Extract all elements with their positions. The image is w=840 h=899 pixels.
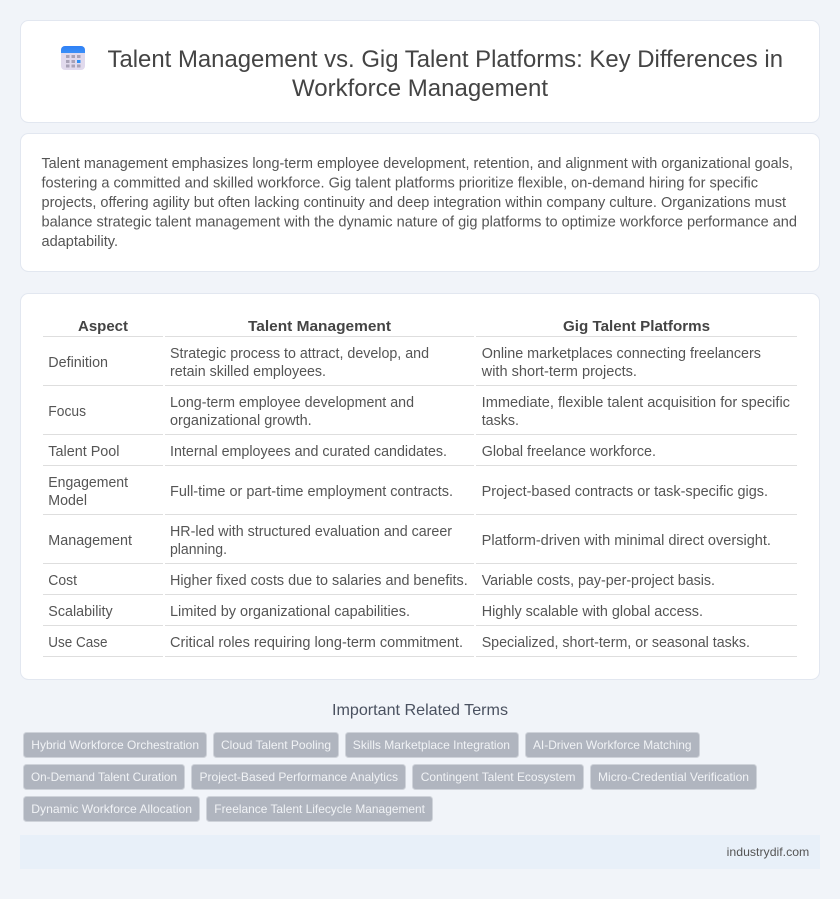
- tag: Skills Marketplace Integration: [346, 732, 518, 758]
- table row: Talent Pool: Internal employees and curated candidates.: [170, 444, 447, 460]
- tag: Freelance Talent Lifecycle Management: [206, 796, 432, 822]
- table header: Gig Talent Platforms: [563, 319, 710, 335]
- text block: introduction paragraph: fostering a committed and skilled workforce. Gig talent platforms prioritize flexible, on-demand hiring for specific: [42, 176, 758, 192]
- table row: Engagement Model: Model: [48, 493, 87, 509]
- table row: Engagement Model: [43, 475, 797, 515]
- table row: Cost: Cost: [48, 573, 77, 589]
- table row: Management: Management: [48, 533, 132, 549]
- table row: Focus: tasks.: [482, 413, 519, 429]
- tag: On-Demand Talent Curation: On-Demand Talent Curation: [31, 770, 177, 784]
- tag: Micro-Credential Verification: Micro-Credential Verification: [598, 770, 749, 784]
- title: Talent Management vs. Gig Talent Platforms: Key Differences in: [108, 46, 783, 73]
- tag: Cloud Talent Pooling: [214, 732, 338, 758]
- table row: Definition: Strategic process to attract, develop, and: [170, 346, 429, 362]
- text block: introduction paragraph: balance strategic talent management with the dynamic nature of gig platforms to optimize workforce performance and: [42, 214, 797, 230]
- table row: Focus: Focus: [48, 404, 86, 420]
- table row: Management: [43, 524, 797, 564]
- table row: Management: planning.: [170, 542, 227, 558]
- table row: Focus: organizational growth.: [170, 413, 312, 429]
- table row: Definition: [43, 346, 797, 386]
- text block: introduction paragraph: adaptability.: [42, 234, 118, 250]
- table row: Use Case: [43, 635, 797, 657]
- tag: Project-Based Performance Analytics: Project-Based Performance Analytics: [200, 770, 398, 784]
- title: Workforce Management: [292, 75, 548, 102]
- table row: Use Case: Specialized, short-term, or seasonal tasks.: [482, 635, 750, 651]
- table row: Definition: with short-term projects.: [481, 364, 637, 380]
- table header: Talent Management: [248, 319, 391, 335]
- heading: important related terms: Important Related Terms: [332, 702, 508, 719]
- tag: Skills Marketplace Integration: Skills Marketplace Integration: [353, 738, 510, 752]
- tag: On-Demand Talent Curation: [24, 764, 184, 790]
- table row: Scalability: Scalability: [48, 604, 113, 620]
- table row: Use Case: Use Case: [48, 635, 108, 651]
- table row: Management: Platform-driven with minimal direct oversight.: [482, 533, 771, 549]
- table row: Use Case: Critical roles requiring long-term commitment.: [170, 635, 463, 651]
- title: [108, 46, 783, 102]
- text block: introduction paragraph: projects, offering agility but often lacking continuity and deep integration within company culture. Organizations must: [42, 195, 786, 211]
- tag: Contingent Talent Ecosystem: Contingent Talent Ecosystem: [421, 770, 576, 784]
- table row: Cost: Higher fixed costs due to salaries and benefits.: [170, 573, 468, 589]
- panel: comparison table: [20, 294, 820, 680]
- table row: Definition: Online marketplaces connecting freelancers: [482, 346, 761, 362]
- tag: Dynamic Workforce Allocation: Dynamic Workforce Allocation: [31, 802, 192, 816]
- tag: Micro-Credential Verification: [590, 764, 756, 790]
- tag: Project-Based Performance Analytics: [192, 764, 406, 790]
- tag: Hybrid Workforce Orchestration: Hybrid Workforce Orchestration: [31, 738, 199, 752]
- table row: Focus: Immediate, flexible talent acquisition for specific: [482, 395, 790, 411]
- table row: Talent Pool: Global freelance workforce.: [482, 444, 656, 460]
- tag: AI-Driven Workforce Matching: [526, 732, 700, 758]
- table row: Talent Pool: Talent Pool: [48, 444, 119, 460]
- table row: Talent Pool: [43, 444, 797, 466]
- table row: Cost: [43, 573, 797, 595]
- table header: Aspect: [78, 319, 128, 335]
- table row: Focus: Long-term employee development and: [170, 395, 414, 411]
- tag: Hybrid Workforce Orchestration: [24, 732, 206, 758]
- table row: Focus: [43, 395, 797, 435]
- table row: Engagement Model: Project-based contracts or task-specific gigs.: [482, 484, 768, 500]
- table row: Management: HR-led with structured evaluation and career: [170, 524, 452, 540]
- table header: [43, 319, 797, 337]
- table row: Engagement Model: Full-time or part-time employment contracts.: [170, 484, 453, 500]
- text block: introduction paragraph: Talent management emphasizes long-term employee development, retention, and alignment with organizational goals,: [42, 156, 793, 172]
- table row: Definition: Definition: [48, 355, 108, 371]
- table row: Definition: retain skilled employees.: [170, 364, 326, 380]
- text block: introduction paragraph: [42, 156, 797, 250]
- footer: industrydif.com: [727, 845, 809, 859]
- table row: Scalability: [43, 604, 797, 626]
- tag: Freelance Talent Lifecycle Management: Freelance Talent Lifecycle Management: [214, 802, 426, 816]
- footer: [20, 835, 820, 869]
- table row: Scalability: Limited by organizational capabilities.: [170, 604, 410, 620]
- tag: Dynamic Workforce Allocation: [24, 796, 200, 822]
- table row: Cost: Variable costs, pay-per-project basis.: [482, 573, 715, 589]
- tag: Cloud Talent Pooling: Cloud Talent Pooling: [221, 738, 331, 752]
- icon: calendar: [61, 46, 85, 70]
- table row: Engagement Model: Engagement: [48, 475, 128, 491]
- panel: related term tags: [24, 732, 756, 822]
- panel: introduction: [20, 134, 820, 272]
- tag: Contingent Talent Ecosystem: [412, 764, 584, 790]
- tag: AI-Driven Workforce Matching: AI-Driven Workforce Matching: [533, 738, 692, 752]
- panel: title card: [20, 20, 820, 122]
- table row: Scalability: Highly scalable with global access.: [482, 604, 703, 620]
